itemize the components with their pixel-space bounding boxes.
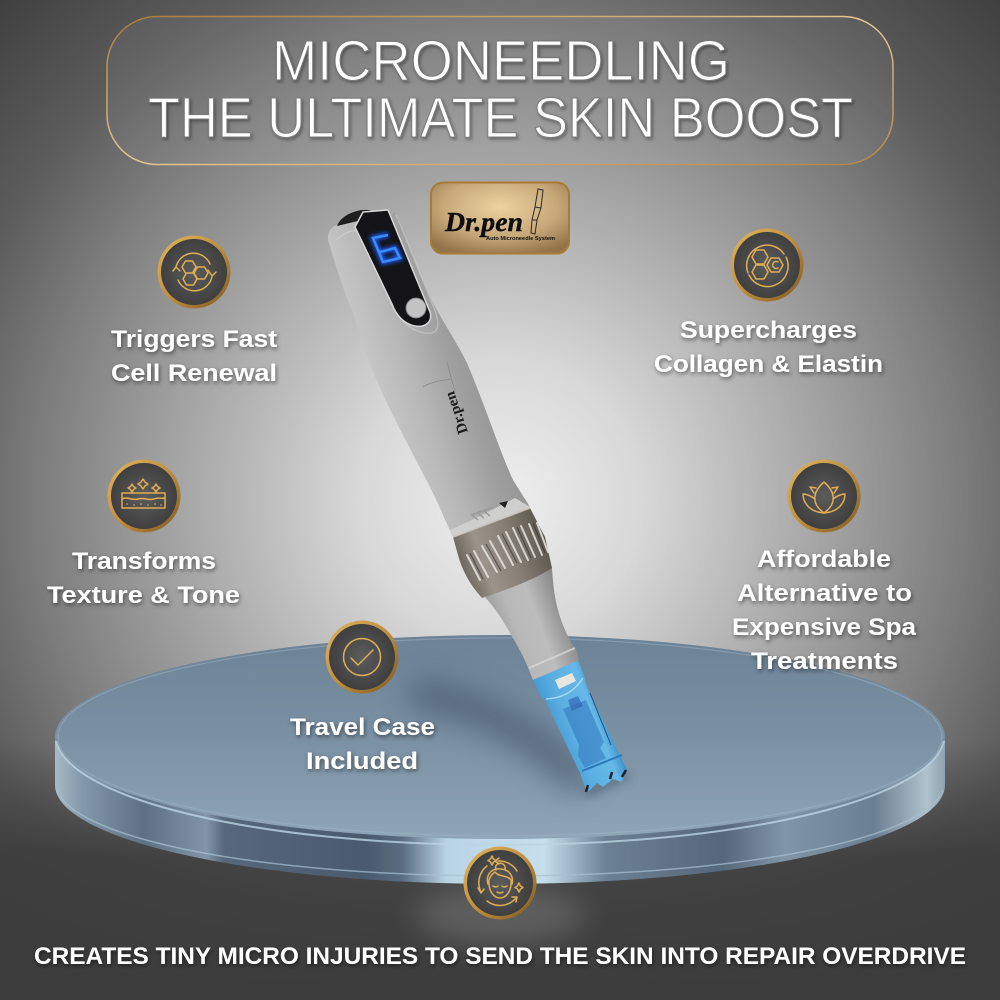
benefit: affordable alternative xyxy=(732,460,917,675)
pen cartridge xyxy=(532,660,627,793)
benefit: transforms texture and tone xyxy=(47,460,240,609)
title line 2: THE ULTIMATE SKIN BOOST xyxy=(148,86,853,150)
pen main body xyxy=(328,213,530,537)
title panel xyxy=(107,16,893,164)
icon: lotus xyxy=(788,460,860,532)
pen dial scale xyxy=(450,498,530,537)
label line 3: Expensive Spa xyxy=(732,614,917,641)
title line 1: MICRONEEDLING xyxy=(272,29,730,93)
display digit glow xyxy=(373,235,400,262)
pen neck ring xyxy=(529,648,575,668)
label: Transforms xyxy=(72,548,216,575)
display digit xyxy=(373,235,400,262)
pen shadow on platform xyxy=(425,695,575,775)
label line 2: Collagen & Elastin xyxy=(654,351,883,378)
benefit: triggers fast cell renewal xyxy=(111,236,277,387)
label line 2: Alternative to xyxy=(737,580,912,607)
icon: skin layers xyxy=(108,460,180,532)
bottom caption: CREATES TINY MICRO INJURIES TO SEND THE SKIN INTO REPAIR OVERDRIVE xyxy=(34,943,966,970)
label line 2: Cell Renewal xyxy=(111,360,277,387)
icon: face with renewal arrows xyxy=(464,846,536,920)
platform top surface xyxy=(55,635,945,839)
pen dark end cap xyxy=(337,210,373,226)
platform inner sheen xyxy=(58,638,942,836)
icon: collagen molecule xyxy=(730,228,804,302)
label line 2: Texture & Tone xyxy=(47,582,240,609)
label: Supercharges xyxy=(680,317,857,344)
pen dial marker xyxy=(499,501,508,508)
icon: check mark xyxy=(326,620,398,694)
pen dial chevrons xyxy=(472,507,493,520)
benefit: supercharges collagen and elastin xyxy=(654,228,883,378)
product: microneedling pen xyxy=(328,210,628,793)
brand wordmark: Dr.pen xyxy=(444,207,523,237)
bottom glow behind caption icon xyxy=(415,885,585,945)
brand tagline: Auto Microneedle System xyxy=(486,236,556,242)
platform disc xyxy=(55,635,945,884)
pen printed line drawing xyxy=(423,362,455,392)
label line 4: Treatments xyxy=(751,648,898,675)
platform front edge highlight xyxy=(56,741,944,845)
label: Affordable xyxy=(757,546,891,573)
brand badge xyxy=(431,182,569,254)
pen contact shadow xyxy=(585,775,628,793)
platform lower rim highlight xyxy=(57,790,943,876)
label: Triggers Fast xyxy=(111,326,277,353)
label: Travel Case xyxy=(290,714,435,741)
lower background shade xyxy=(0,740,1000,1000)
pen display recess xyxy=(336,214,438,333)
pen display panel xyxy=(355,210,431,326)
pen printed logo: Dr.pen xyxy=(442,388,472,436)
pen power button xyxy=(406,298,426,318)
pen tapered neck xyxy=(485,568,579,680)
pen knurled collar xyxy=(453,508,552,598)
platform side wall xyxy=(55,737,945,884)
icon: honeycomb renewal xyxy=(158,236,230,308)
brand pen sketch xyxy=(531,189,543,234)
label line 2: Included xyxy=(306,748,418,775)
benefit: travel case included xyxy=(290,620,435,775)
